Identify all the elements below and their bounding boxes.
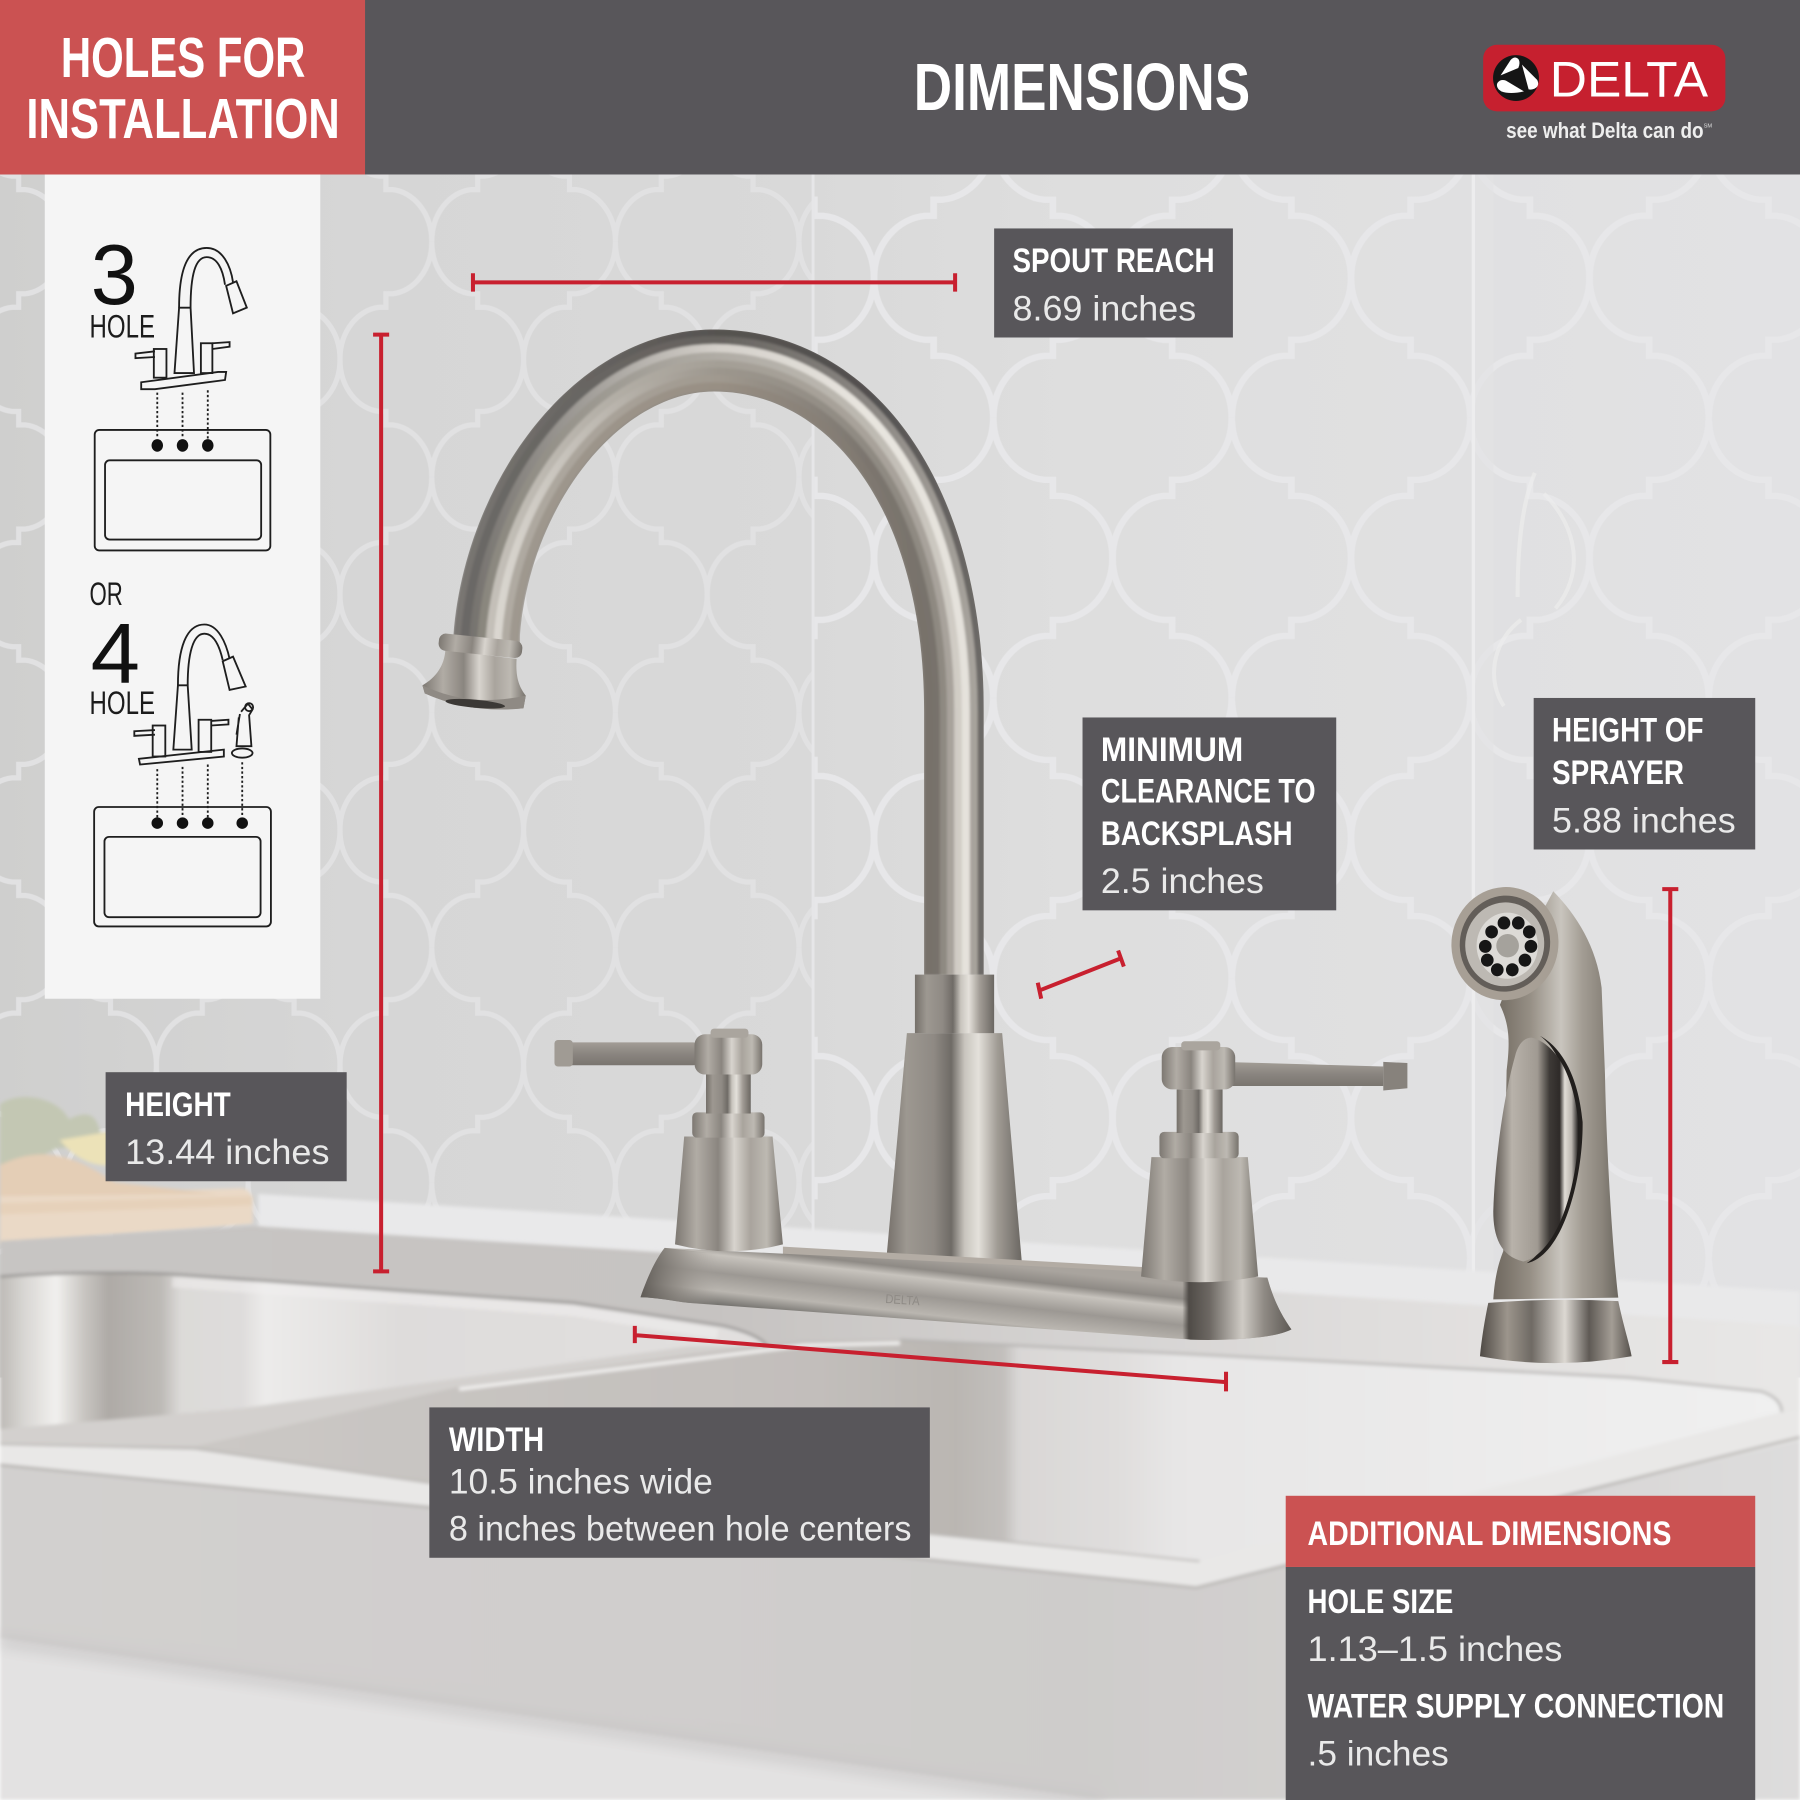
callout: width: WIDTH xyxy=(449,1421,544,1459)
panel: additional dimensions: .5 inches xyxy=(1308,1734,1449,1774)
side sprayer xyxy=(1436,871,1632,1363)
Delta logo xyxy=(1483,45,1725,143)
callout: height: 13.44 inches xyxy=(125,1132,329,1172)
callout: height of sprayer xyxy=(1534,698,1755,849)
callout: width: 10.5 inches wide xyxy=(449,1461,713,1501)
3 hole option xyxy=(90,227,270,550)
dimension line: clearance xyxy=(1038,951,1124,999)
callout: spout reach xyxy=(994,228,1233,338)
callout: height of sprayer: HEIGHT OF xyxy=(1552,712,1704,750)
header bar xyxy=(0,0,1800,174)
faucet: spout xyxy=(457,333,980,976)
callout: height xyxy=(106,1072,347,1181)
panel: holes for installation heading: INSTALLATION xyxy=(26,87,340,150)
Delta logo: DELTA xyxy=(1550,50,1708,107)
Delta logo: SM xyxy=(1704,123,1712,129)
3 hole option: HOLE xyxy=(90,308,155,344)
title: DIMENSIONS xyxy=(914,51,1250,125)
dimension line: spout reach xyxy=(473,273,955,292)
4 hole option: 4 xyxy=(91,606,140,701)
faucet: base plate: DELTA xyxy=(885,1292,921,1308)
4 hole option: HOLE xyxy=(90,685,155,721)
panel: hole options xyxy=(45,174,320,999)
sink and countertop xyxy=(0,1226,1800,1800)
Delta logo: see what Delta can do xyxy=(1506,118,1704,143)
panel: additional dimensions: ADDITIONAL DIMENSIONS xyxy=(1308,1515,1671,1553)
panel: holes for installation heading: HOLES FOR xyxy=(61,26,305,89)
panel: holes for installation heading xyxy=(0,0,365,174)
faucet: center column xyxy=(886,975,1022,1267)
callout: height of sprayer: 5.88 inches xyxy=(1552,800,1736,840)
panel: additional dimensions: 1.13–1.5 inches xyxy=(1308,1629,1562,1669)
cutting board with food xyxy=(0,1097,253,1244)
dimension line: sprayer height xyxy=(1662,889,1678,1363)
3 hole option: 3 xyxy=(91,227,138,322)
callout: spout reach: SPOUT REACH xyxy=(1013,242,1215,280)
4 hole option xyxy=(90,576,271,926)
dimension line: width xyxy=(635,1326,1226,1391)
panel: additional dimensions xyxy=(1286,1496,1755,1800)
faucet: right handle xyxy=(1141,1041,1407,1282)
callout: height of sprayer: SPRAYER xyxy=(1552,754,1684,792)
callout: width xyxy=(429,1407,930,1558)
faucet: left handle xyxy=(554,1029,783,1251)
faucet: base plate xyxy=(641,1247,1291,1340)
panel: additional dimensions: WATER SUPPLY CONNECTION xyxy=(1308,1687,1724,1725)
callout: minimum clearance: CLEARANCE TO xyxy=(1101,772,1316,810)
4 hole option: OR xyxy=(90,576,123,612)
background: tiled wall xyxy=(0,174,1800,1378)
callout: spout reach: 8.69 inches xyxy=(1013,288,1196,328)
callout: height: HEIGHT xyxy=(125,1086,231,1124)
callout: minimum clearance: 2.5 inches xyxy=(1101,861,1264,901)
callout: minimum clearance xyxy=(1083,717,1336,910)
callout: minimum clearance: BACKSPLASH xyxy=(1101,815,1293,853)
panel: additional dimensions: HOLE SIZE xyxy=(1308,1583,1453,1621)
callout: minimum clearance: MINIMUM xyxy=(1101,731,1243,769)
callout: width: 8 inches between hole centers xyxy=(449,1509,911,1549)
faucet: aerator xyxy=(422,633,526,710)
dimension line: height xyxy=(373,334,389,1272)
